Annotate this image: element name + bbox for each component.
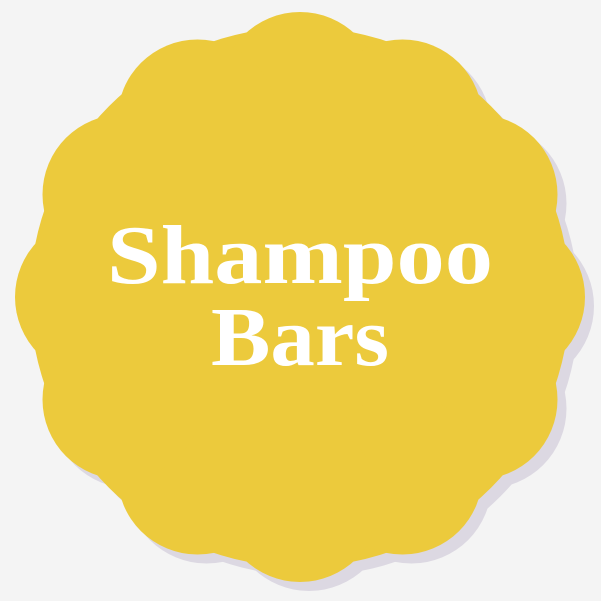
title line 2: Bars <box>211 291 389 384</box>
title text <box>107 209 493 384</box>
title line 1: Shampoo <box>107 209 493 302</box>
